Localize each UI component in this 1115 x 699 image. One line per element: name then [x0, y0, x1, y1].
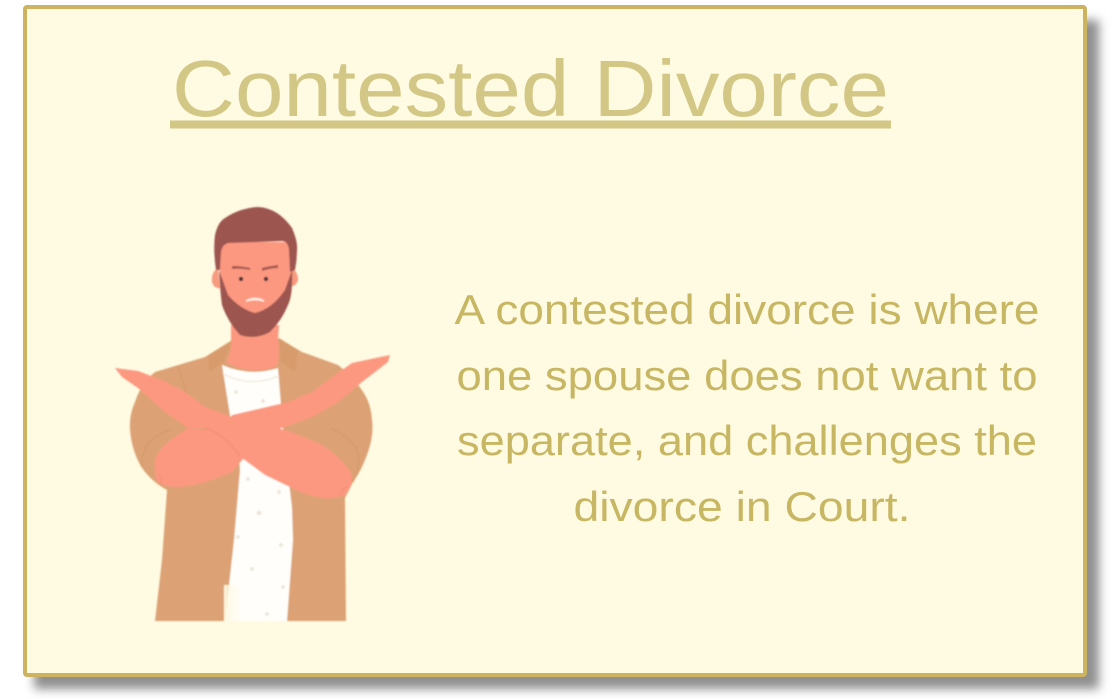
description text: one spouse does not want to [456, 352, 1038, 399]
description text: divorce in Court. [574, 483, 910, 530]
face [220, 242, 291, 326]
shirt dots [234, 390, 285, 616]
shirt hem fade [224, 585, 242, 622]
description text [454, 286, 1040, 530]
shirt collar ribbing [223, 374, 279, 382]
arm crease [158, 428, 349, 496]
mouth [246, 298, 264, 301]
arm: rising to the right, elbow [155, 428, 244, 487]
beard [219, 270, 292, 337]
description text: A contested divorce is where [454, 286, 1040, 333]
jacket seams [142, 366, 359, 482]
eyebrows [232, 265, 278, 271]
arm: rising to the left [115, 368, 352, 498]
neck [226, 325, 279, 370]
eyes [239, 277, 243, 281]
shirt [222, 365, 293, 621]
ears [212, 268, 298, 288]
description text: separate, and challenges the [457, 417, 1037, 464]
jacket [130, 338, 372, 621]
collar [208, 338, 298, 372]
title: Contested Divorce [172, 44, 889, 133]
illustration: man crossing arms to refuse [115, 207, 390, 622]
arm: rising to the right, hand and forearm [220, 355, 390, 440]
hair [214, 207, 297, 272]
